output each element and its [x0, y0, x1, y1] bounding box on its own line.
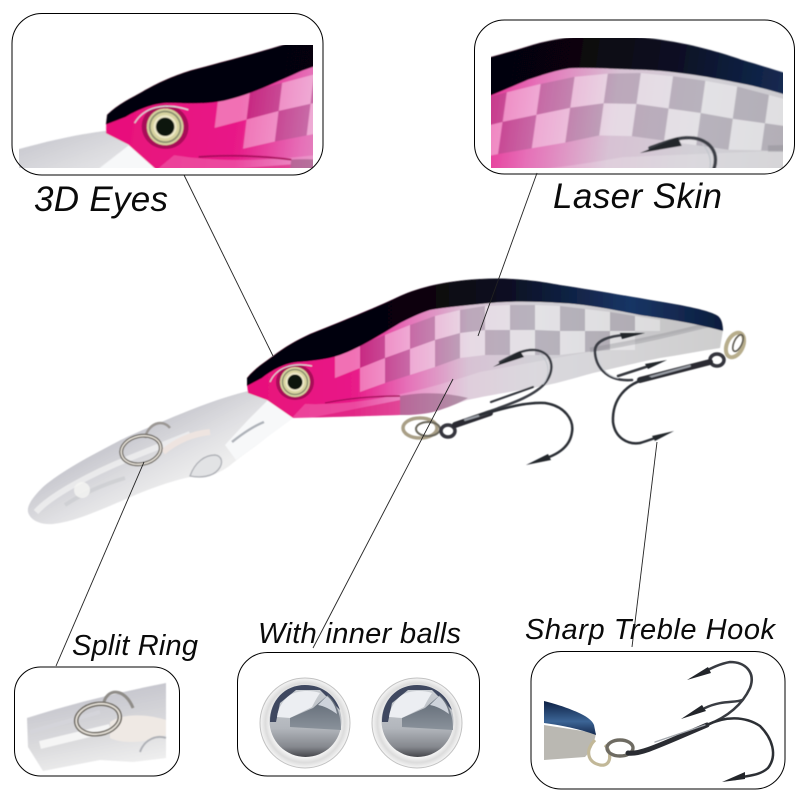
label: 3D Eyes: 3D Eyes — [34, 180, 168, 219]
label: Laser Skin: Laser Skin — [553, 177, 722, 216]
icon: steel ball right — [372, 678, 462, 768]
connector line: treble hook — [632, 442, 657, 647]
icon: steel ball left — [260, 678, 350, 768]
panel: treble hook close-up — [531, 652, 785, 789]
panel: laser skin close-up — [13, 0, 800, 398]
label: Split Ring: Split Ring — [72, 630, 198, 662]
connector line: split ring — [56, 462, 144, 666]
panel: 3D eyes close-up — [12, 13, 324, 176]
lip detail — [27, 683, 166, 771]
connector line: inner balls — [313, 379, 453, 648]
lure tail blue back — [544, 701, 596, 735]
panel: inner balls — [238, 652, 480, 776]
lure tail — [544, 725, 596, 760]
label: With inner balls: With inner balls — [258, 618, 461, 650]
treble hook — [628, 662, 773, 782]
hook rings — [589, 740, 633, 765]
connector line: laser skin — [478, 173, 537, 336]
main lure — [28, 270, 748, 524]
connector line: 3D eyes — [184, 175, 273, 356]
panel: split ring close-up — [14, 667, 180, 776]
label: Sharp Treble Hook: Sharp Treble Hook — [525, 614, 776, 646]
icon: split ring — [74, 692, 133, 738]
